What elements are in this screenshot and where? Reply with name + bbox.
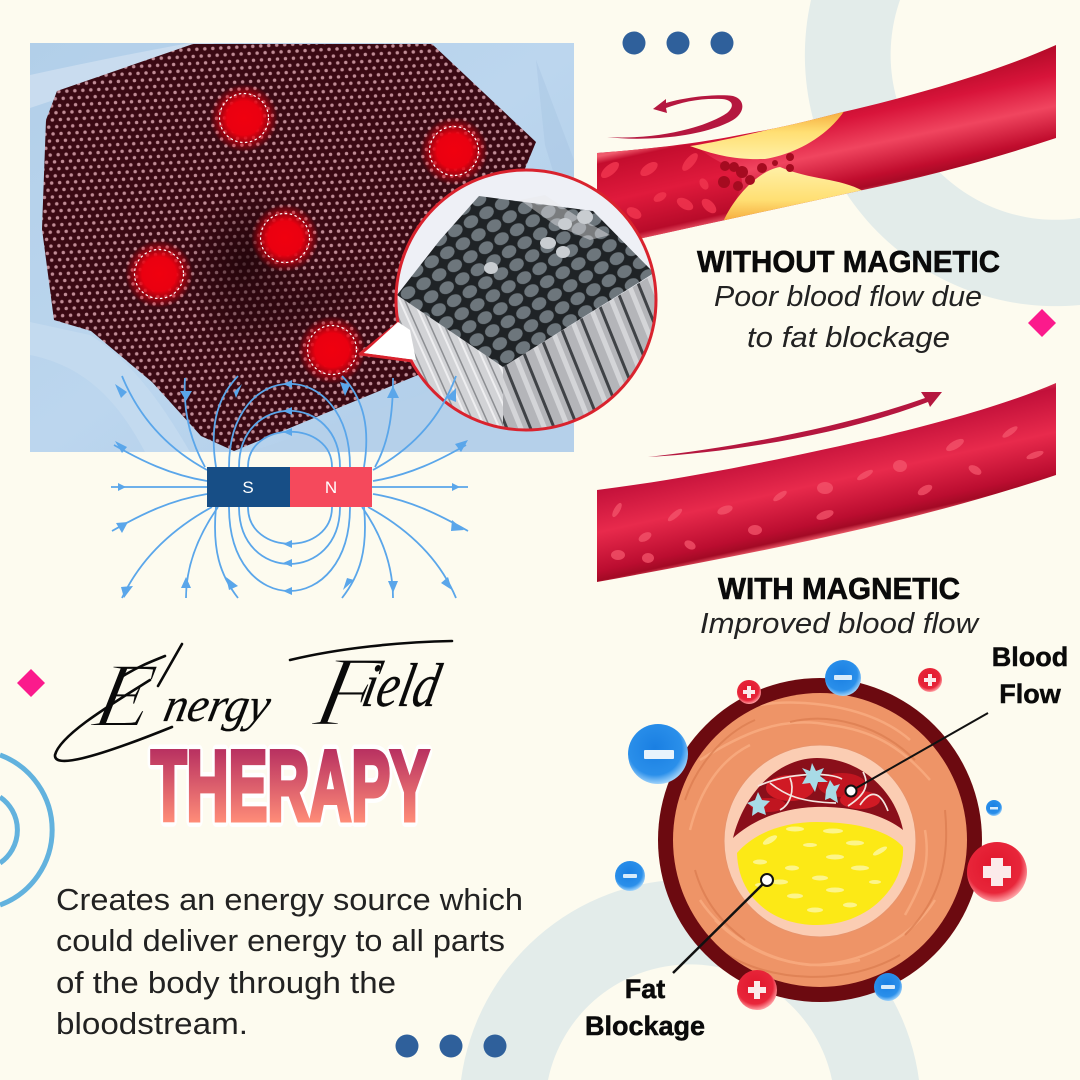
blood flow channel	[733, 758, 903, 838]
red heat point 3	[251, 204, 319, 272]
title: energy field script: ield	[357, 651, 447, 720]
bar magnet	[207, 467, 372, 507]
ion: large positive	[967, 842, 1027, 902]
body paragraph: bloodstream.	[56, 1006, 248, 1041]
N label: N	[325, 478, 337, 497]
body paragraph: of the body through the	[56, 965, 396, 1000]
heading: with magnetic: WITH MAGNETIC	[718, 571, 960, 606]
dots top	[622, 32, 734, 54]
label: blood flow: Flow	[999, 679, 1062, 709]
title: therapy	[151, 730, 429, 841]
title: therapy: THERAPY	[151, 730, 429, 841]
ion: bottom positive	[737, 970, 777, 1010]
ion: bottom negative	[874, 973, 902, 1001]
label: blood flow: Blood	[992, 642, 1068, 672]
artery cross-section diagram	[658, 678, 982, 1002]
arrow: blocked flow turning back	[607, 95, 742, 139]
arrow: improved flow	[648, 392, 942, 457]
red heat point 1	[210, 84, 278, 152]
title: energy field script: nergy	[159, 679, 276, 732]
title: energy field script: E	[84, 645, 164, 747]
panel: magnet close-up inset	[360, 170, 670, 450]
label: fat blockage: Blockage	[585, 1011, 705, 1041]
leader line: blood flow	[846, 713, 988, 796]
title: energy field script: F	[305, 636, 392, 747]
blood vessel: with magnetic	[597, 383, 1056, 582]
pink diamond left	[17, 669, 45, 697]
decorative ring bottom	[461, 879, 919, 1080]
fat blockage	[737, 822, 903, 925]
caption: improved blood flow: Improved blood flow	[700, 608, 980, 640]
ion: top negative	[825, 660, 861, 696]
decorative ring top right	[805, 0, 1080, 306]
red heat point 2	[420, 117, 488, 185]
caption: poor blood flow: Poor blood flow due	[714, 281, 982, 313]
ion: top left positive	[737, 680, 761, 704]
blood vessel: without magnetic	[597, 45, 1056, 250]
caption: poor blood flow: to fat blockage	[747, 322, 950, 354]
red heat point 5	[298, 316, 366, 384]
pink diamond right	[1028, 309, 1056, 337]
heading: without magnetic: WITHOUT MAGNETIC	[697, 244, 1000, 279]
leader line: fat blockage	[673, 874, 773, 973]
ion: large negative	[628, 724, 688, 784]
body paragraph: could deliver energy to all parts	[56, 923, 505, 958]
label: fat blockage: Fat	[625, 974, 665, 1004]
title: energy field script	[55, 636, 452, 761]
ion: small right negative	[986, 800, 1002, 816]
field line arrowheads	[115, 380, 468, 598]
north pole	[290, 467, 372, 507]
red heat point 4	[125, 240, 193, 308]
south pole	[207, 467, 290, 507]
panel: underwear photo with magnets	[30, 43, 574, 452]
decorative concentric circles left	[0, 755, 52, 905]
ion: left negative	[615, 861, 645, 891]
dots bottom	[396, 1034, 506, 1058]
ion: top right positive	[918, 668, 942, 692]
magnetic field lines	[111, 376, 468, 598]
body paragraph: Creates an energy source which	[56, 882, 523, 917]
title: therapy: THERAPY	[151, 730, 429, 841]
S label: S	[242, 478, 254, 497]
